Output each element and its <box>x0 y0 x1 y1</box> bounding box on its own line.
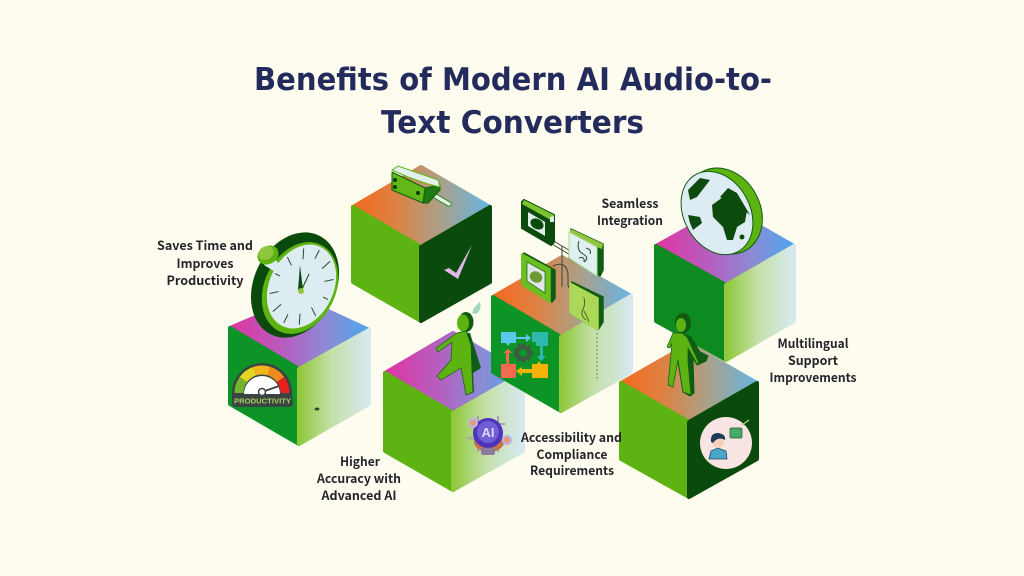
icon: walking person on support cube <box>667 313 708 396</box>
icon: customer support agent <box>700 417 752 469</box>
icon: globe <box>667 154 777 268</box>
icon: check mark <box>444 245 472 279</box>
label: accessibility: Accessibility and <box>520 427 622 446</box>
title: Benefits of Modern AI Audio-to- <box>254 62 772 98</box>
label: accessibility: Requirements <box>530 460 614 479</box>
dotted line <box>596 333 598 379</box>
icon: stopwatch <box>234 218 356 352</box>
title <box>254 62 772 141</box>
icon: app tile dark <box>522 200 554 245</box>
cube: puzzle workflow <box>493 257 631 411</box>
label: saves time: Saves Time and <box>157 235 253 254</box>
icon: AI chip <box>468 416 512 455</box>
connector lines between tiles <box>552 240 575 291</box>
cube: check mark <box>353 167 490 321</box>
label: saves time <box>157 235 253 289</box>
cube: globe <box>656 207 794 360</box>
label: multilingual <box>770 333 856 386</box>
label: higher accuracy: Advanced AI <box>320 485 396 504</box>
leaf accent <box>472 302 480 314</box>
globe continents <box>688 178 750 240</box>
icon: app tile info <box>570 282 603 330</box>
label: accessibility <box>520 427 622 479</box>
icon: app tile green face <box>522 253 555 302</box>
title: Text Converters <box>381 105 644 141</box>
label: higher accuracy: Higher <box>340 451 381 470</box>
label: multilingual: Improvements <box>770 367 856 386</box>
icon: puzzle workflow <box>501 332 548 378</box>
icon: app tile pale <box>569 229 603 276</box>
label: seamless integration: Seamless <box>602 193 658 212</box>
label: seamless integration <box>597 193 663 229</box>
cube: customer support <box>621 344 757 497</box>
label: multilingual: Support <box>788 350 839 369</box>
label: accessibility: Compliance <box>536 444 608 463</box>
label: higher accuracy <box>316 451 401 504</box>
label: saves time: Improves <box>176 253 234 272</box>
icon: productivity gauge: PRODUCTIVITY <box>234 396 291 406</box>
cube: productivity <box>230 298 369 444</box>
label: multilingual: Multilingual <box>778 333 849 352</box>
icon: green device on cube <box>392 166 449 204</box>
label: seamless integration: Integration <box>597 210 663 229</box>
label: higher accuracy: Accuracy with <box>316 468 401 487</box>
cube: AI chip <box>385 333 523 490</box>
small mark <box>314 408 320 410</box>
stopwatch ticks <box>257 237 346 336</box>
stopwatch hands <box>298 265 309 294</box>
icon: AI chip: AI <box>482 425 494 440</box>
label: saves time: Productivity <box>166 270 244 289</box>
icon: walking person on AI cube <box>436 312 481 395</box>
stopwatch button <box>254 242 284 273</box>
icon: productivity gauge <box>232 363 293 407</box>
